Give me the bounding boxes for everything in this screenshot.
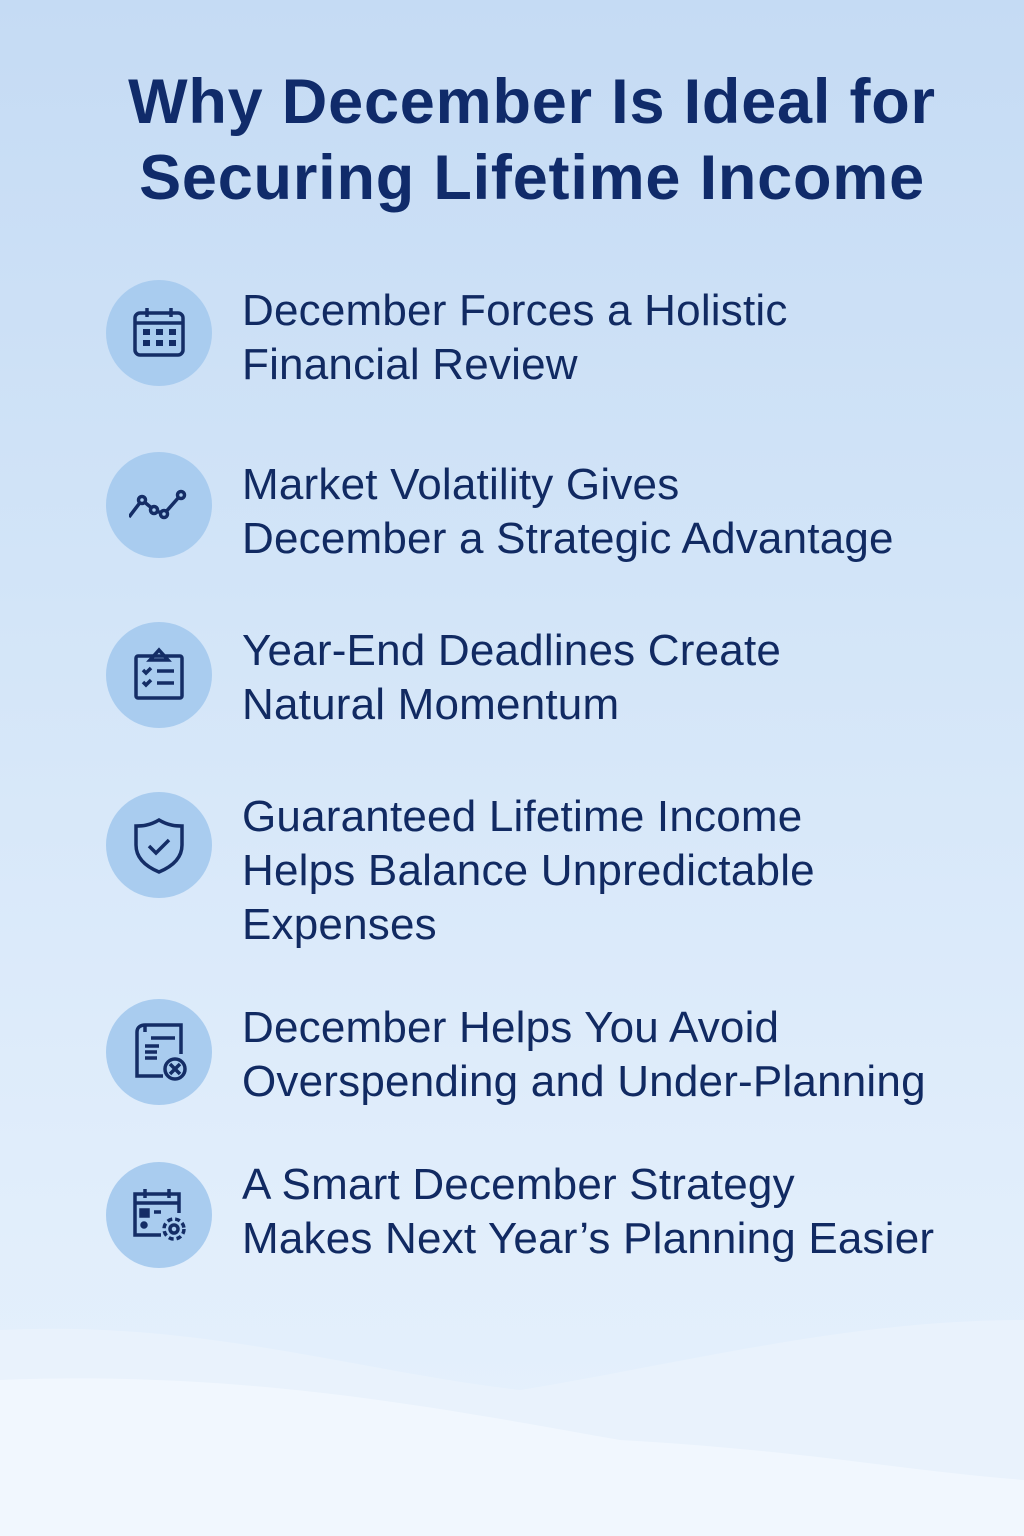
title <box>128 67 936 213</box>
text: Market Volatility Gives <box>242 460 679 509</box>
text: Financial Review <box>242 340 578 389</box>
text: Helps Balance Unpredictable <box>242 846 815 895</box>
text <box>242 1003 926 1106</box>
item 6 <box>106 1160 934 1268</box>
item 4 <box>106 792 815 949</box>
text: December a Strategic Advantage <box>242 514 894 563</box>
text: Guaranteed Lifetime Income <box>242 792 802 841</box>
item 2 <box>106 452 894 563</box>
text: December Helps You Avoid <box>242 1003 779 1052</box>
text <box>242 1160 934 1263</box>
item 3 <box>106 622 781 729</box>
item 5 <box>106 999 926 1106</box>
title: Why December Is Ideal for <box>128 67 936 137</box>
icon: checklist clipboard <box>106 622 212 728</box>
icon: calendar gear <box>106 1162 212 1268</box>
icon: calendar <box>106 280 212 386</box>
text <box>242 626 781 729</box>
text <box>242 792 815 949</box>
text: Overspending and Under-Planning <box>242 1057 926 1106</box>
snow hills <box>0 1378 1024 1536</box>
text: Expenses <box>242 900 437 949</box>
text: December Forces a Holistic <box>242 286 788 335</box>
text: A Smart December Strategy <box>242 1160 795 1209</box>
text <box>242 460 894 563</box>
text: Natural Momentum <box>242 680 619 729</box>
text: Makes Next Year’s Planning Easier <box>242 1214 934 1263</box>
text: Year-End Deadlines Create <box>242 626 781 675</box>
icon: shield check <box>106 792 212 898</box>
icon: document with x <box>106 999 212 1105</box>
title: Securing Lifetime Income <box>139 143 925 213</box>
text <box>242 286 788 389</box>
item 1 <box>106 280 788 389</box>
icon: line chart <box>106 452 212 558</box>
